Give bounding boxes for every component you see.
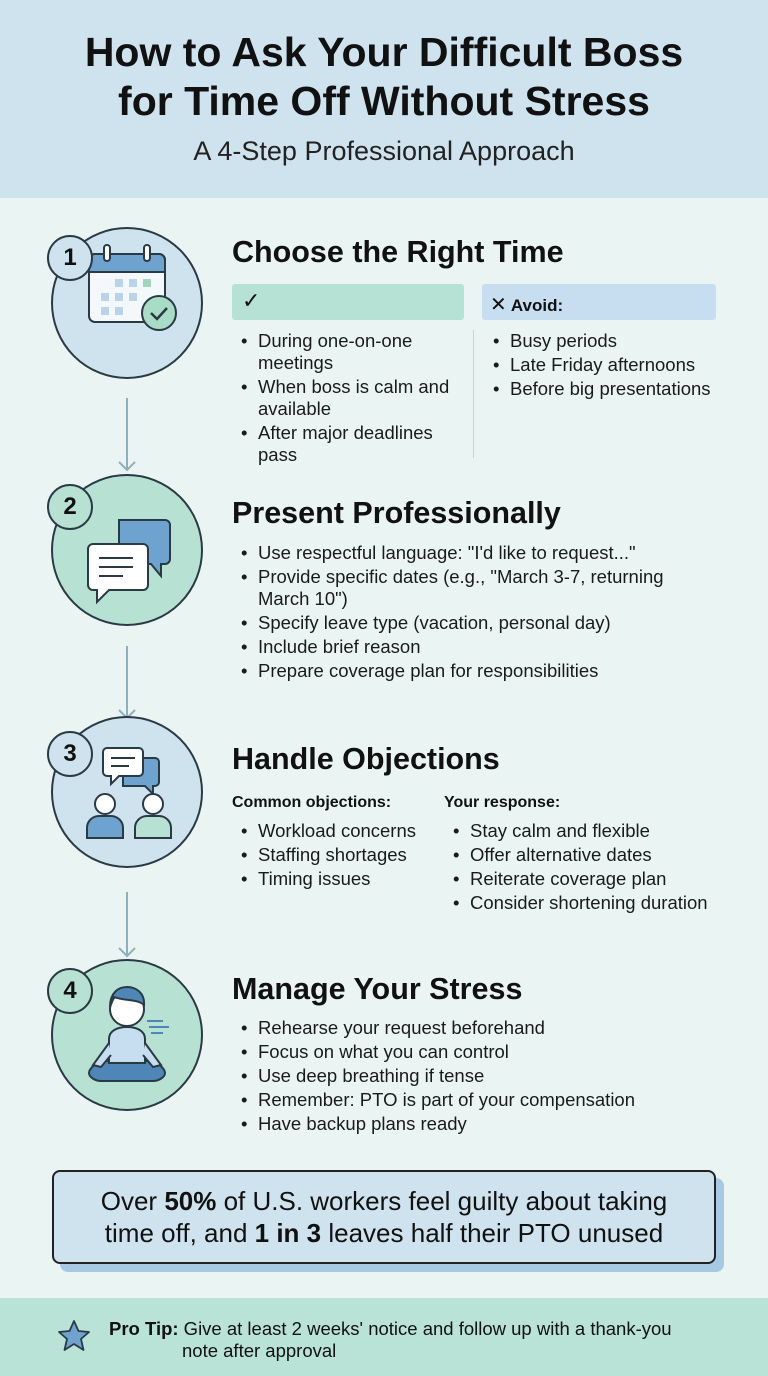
objections column: Staffing shortages [258,844,407,865]
badge 2 [47,484,93,530]
step 2 list [242,542,664,681]
avoid list: Before big presentations [510,378,711,399]
objections column: Timing issues [258,868,370,889]
pro tip text: note after approval [182,1340,336,1361]
badge 1: 1 [63,244,77,271]
badge 3: 3 [63,740,77,767]
do list: When boss is calm and available [258,376,449,419]
title [85,29,683,124]
do list [242,330,449,465]
step 4 icon [51,959,203,1111]
avoid list: Late Friday afternoons [510,354,695,375]
step 2 list: Include brief reason [258,636,420,657]
icon: star [58,1320,90,1351]
do list: During one-on-one meetings [258,330,412,373]
badge 3 [47,731,93,777]
step 4 list: Rehearse your request beforehand [258,1017,545,1038]
step 1 icon [51,227,203,379]
stat callout [52,1170,724,1272]
response column: Offer alternative dates [470,844,652,865]
response column: Consider shortening duration [470,892,708,913]
avoid list: Busy periods [510,330,617,351]
stat callout: Over 50% of U.S. workers feel guilty about taking [101,1186,667,1216]
badge 2: 2 [63,493,77,520]
subtitle: A 4-Step Professional Approach [193,136,575,166]
avoid box: ✕ Avoid: [490,294,563,316]
do box: ✓ [242,288,260,313]
title: for Time Off Without Stress [118,78,650,124]
pro tip text [109,1318,672,1361]
badge 4 [47,968,93,1014]
step 4 list: Use deep breathing if tense [258,1065,484,1086]
objections column [232,794,416,889]
avoid box [482,284,716,320]
title: How to Ask Your Difficult Boss [85,29,683,75]
step 2 list: Provide specific dates (e.g., "March 3-7, returning March 10") [258,566,664,609]
header band [0,0,768,198]
footer pro tip [0,1298,768,1376]
stat callout: time off, and 1 in 3 leaves half their PTO unused [105,1218,663,1248]
step 4 heading: Manage Your Stress [232,972,522,1006]
step 2 list: Prepare coverage plan for responsibilities [258,660,598,681]
step 3 heading: Handle Objections [232,742,500,776]
response column [444,794,708,913]
step 2 list: Use respectful language: "I'd like to request..." [258,542,636,563]
pro tip text: Pro Tip: Give at least 2 weeks' notice and follow up with a thank-you [109,1318,672,1339]
badge 1 [47,235,93,281]
step 2 icon [51,474,203,626]
step 4 list: Remember: PTO is part of your compensation [258,1089,635,1110]
arrow 2-3 [118,646,136,716]
step 4 list [242,1017,635,1134]
step 1 heading: Choose the Right Time [232,235,564,269]
objections column: Common objections: [232,794,391,811]
step 2 heading: Present Professionally [232,496,561,530]
step 2 list: Specify leave type (vacation, personal day) [258,612,611,633]
response column: Reiterate coverage plan [470,868,666,889]
avoid list [494,330,711,399]
step 3 icon [51,716,203,868]
response column: Stay calm and flexible [470,820,650,841]
badge 4: 4 [63,977,77,1004]
response column: Your response: [444,794,560,811]
arrow 3-4 [118,892,136,958]
step 4 list: Focus on what you can control [258,1041,509,1062]
step 4 list: Have backup plans ready [258,1113,467,1134]
arrow 1-2 [118,398,136,472]
objections column: Workload concerns [258,820,416,841]
do box [232,284,464,320]
do list: After major deadlines pass [258,422,433,465]
